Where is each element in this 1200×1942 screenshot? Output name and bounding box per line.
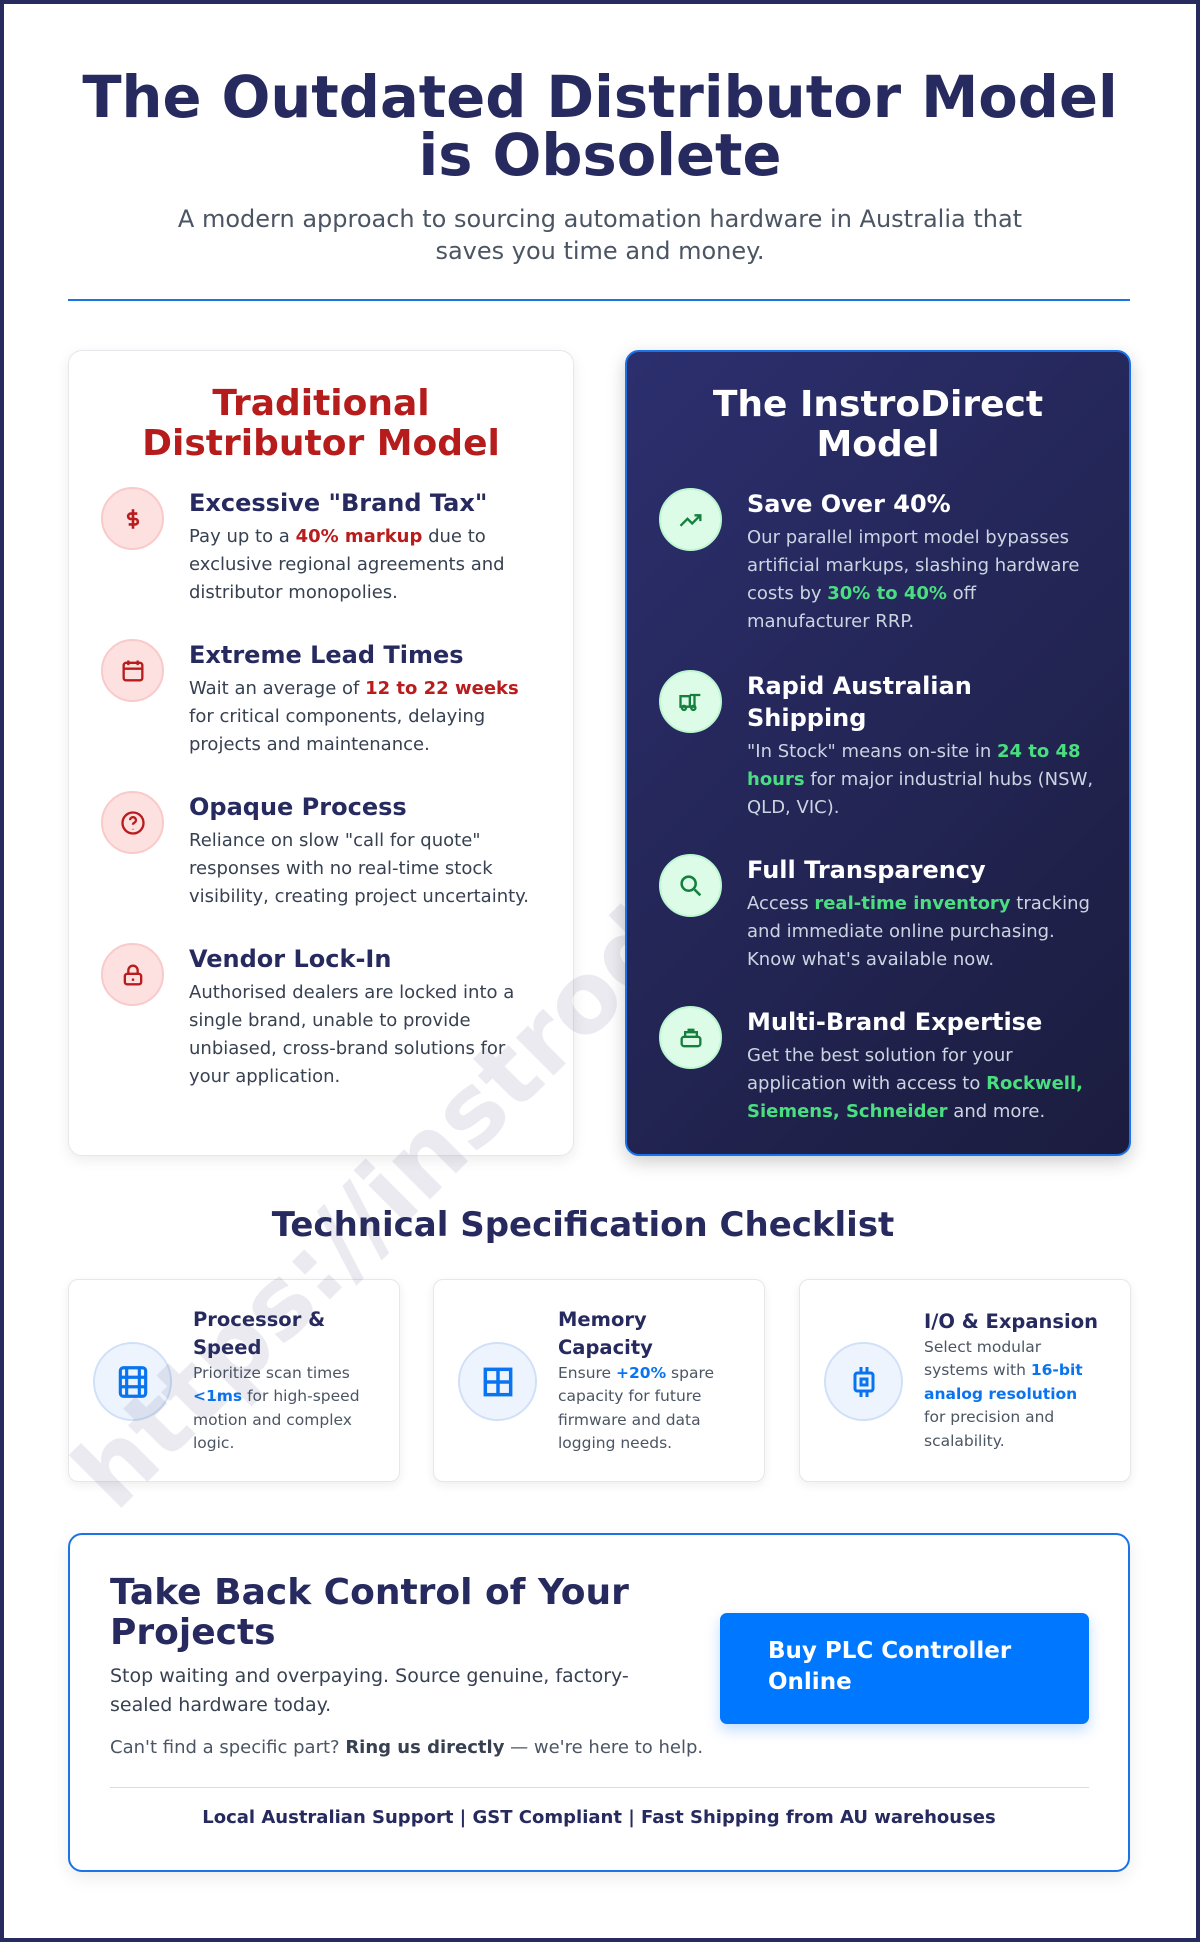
button: buy plc: Buy PLC Controller Online <box>768 1638 1011 1695</box>
icon: calendar <box>101 639 164 702</box>
icon: lock <box>101 943 164 1006</box>
item: lead times <box>101 639 519 755</box>
item: lead times: Extreme Lead Times <box>189 641 464 669</box>
item: brand tax <box>101 487 505 603</box>
icon: search <box>659 854 722 917</box>
heading: traditional <box>142 383 500 464</box>
heading: traditional: Distributor Model <box>142 423 500 464</box>
item: multi-brand <box>659 1006 1083 1122</box>
spec card: processor <box>68 1279 400 1482</box>
heading: instrodirect: The InstroDirect <box>713 384 1043 425</box>
spec card: processor: Prioritize scan times <1ms for high-speed motion and complex logic. <box>193 1364 360 1452</box>
title: is Obsolete <box>419 122 781 189</box>
icon: film/cpu <box>93 1342 172 1421</box>
spec card: io: I/O & Expansion <box>924 1310 1098 1333</box>
title <box>82 64 1118 189</box>
item: save <box>659 488 1080 632</box>
cta help line: Can't find a specific part? Ring us directly — we're here to help. <box>110 1737 703 1758</box>
item: lead times: Wait an average of 12 to 22 weeks for critical components, delaying projects and maintenance. <box>189 678 519 755</box>
item: opaque process: Reliance on slow "call for quote" responses with no real-time stock visibility, creating project uncertainty. <box>189 830 529 907</box>
item: transparency <box>659 854 1090 970</box>
spec card: io: Select modular systems with 16-bit analog resolution for precision and scalability. <box>924 1338 1083 1450</box>
item: shipping <box>659 670 1093 818</box>
spec card: processor: Processor & Speed <box>193 1308 325 1358</box>
item: vendor lock-in: Authorised dealers are locked into a single brand, unable to provide unbiased, cross-brand solutions for your application. <box>189 982 514 1087</box>
item: opaque process <box>101 791 529 907</box>
spec card: memory <box>433 1279 765 1482</box>
heading: instrodirect: Model <box>816 424 940 465</box>
title: The Outdated Distributor Model <box>82 64 1118 131</box>
item: multi-brand: Multi-Brand Expertise <box>747 1008 1042 1036</box>
icon: truck <box>659 670 722 733</box>
button: buy plc <box>720 1613 1089 1724</box>
icon: question <box>101 791 164 854</box>
item: brand tax: Pay up to a 40% markup due to exclusive regional agreements and distributor monopolies. <box>189 526 505 603</box>
icon: dollar <box>101 487 164 550</box>
footer line: Local Australian Support | GST Compliant | Fast Shipping from AU warehouses <box>202 1807 996 1828</box>
item: save: Our parallel import model bypasses artificial markups, slashing hardware costs by 30% to 40% off manufacturer RRP. <box>747 527 1080 632</box>
item: vendor lock-in <box>101 943 514 1087</box>
cta heading: Take Back Control of Your Projects <box>110 1572 629 1653</box>
watermark: https://instrodirect <box>52 707 875 1531</box>
panel: call to action <box>68 1533 1130 1872</box>
item: save: Save Over 40% <box>747 490 951 518</box>
icon: trend up <box>659 488 722 551</box>
panel: traditional distributor model <box>68 350 574 1156</box>
icon: chip <box>824 1342 903 1421</box>
cta text: Stop waiting and overpaying. Source genuine, factory-sealed hardware today. <box>110 1665 629 1716</box>
spec card: memory: Memory Capacity <box>558 1308 653 1358</box>
heading: technical checklist: Technical Specification Checklist <box>272 1205 894 1245</box>
item: shipping: Rapid Australian Shipping <box>747 672 972 732</box>
item: vendor lock-in: Vendor Lock-In <box>189 945 391 973</box>
item: shipping: "In Stock" means on-site in 24 to 48 hours for major industrial hubs (NSW, QLD, VIC). <box>747 741 1093 818</box>
item: transparency: Access real-time inventory tracking and immediate online purchasing. Know what's available now. <box>747 893 1090 970</box>
icon: grid <box>458 1342 537 1421</box>
heading: instrodirect <box>713 384 1043 465</box>
item: multi-brand: Get the best solution for your application with access to Rockwell, Siemens, Schneider and more. <box>747 1045 1083 1122</box>
spec card: memory: Ensure +20% spare capacity for future firmware and data logging needs. <box>558 1364 714 1452</box>
subtitle: A modern approach to sourcing automation hardware in Australia that saves you time and money. <box>178 205 1022 265</box>
spec card: io <box>799 1279 1131 1482</box>
icon: box <box>659 1006 722 1069</box>
item: opaque process: Opaque Process <box>189 793 407 821</box>
heading: traditional: Traditional <box>212 383 430 424</box>
item: brand tax: Excessive "Brand Tax" <box>189 489 487 517</box>
item: transparency: Full Transparency <box>747 856 986 884</box>
panel: instrodirect model <box>625 350 1131 1156</box>
